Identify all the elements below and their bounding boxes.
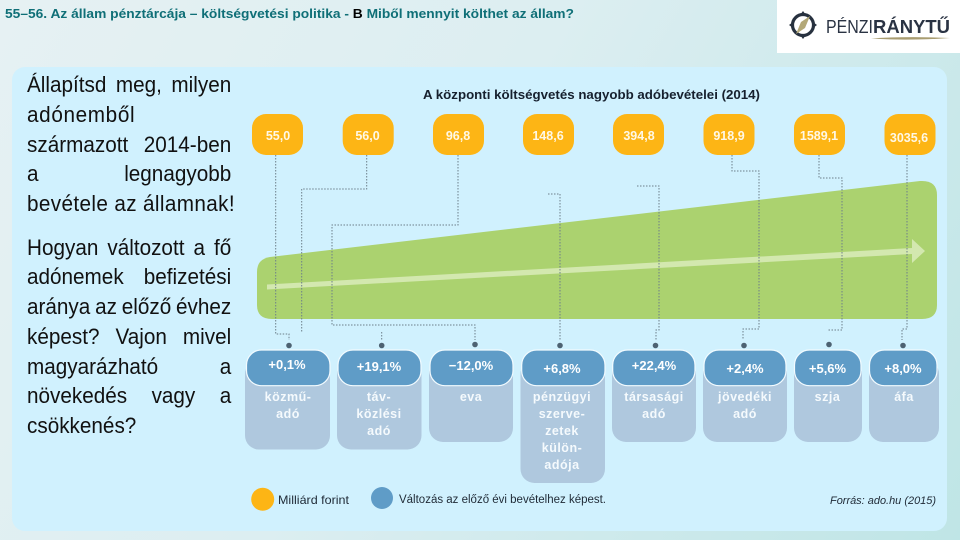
- text block: first question: bevétele az államnak!: [27, 191, 235, 216]
- change values: −12,0%: [449, 358, 494, 373]
- source: Forrás: ado.hu (2015): [830, 495, 936, 507]
- orange values: 1589,1: [800, 129, 838, 143]
- change values: +6,8%: [543, 361, 581, 376]
- orange values: 3035,6: [890, 131, 928, 145]
- text block: second question: csökkenés?: [27, 413, 136, 438]
- category labels: adó: [733, 407, 757, 421]
- category labels: [265, 390, 914, 472]
- change values: +8,0%: [884, 361, 922, 376]
- category labels: jövedéki: [717, 390, 772, 404]
- legend: billion forint: Milliárd forint: [278, 493, 350, 507]
- change values: +5,6%: [809, 361, 847, 376]
- category labels: közmű-: [265, 390, 311, 404]
- legend: change: Változás az előző évi bevételhez képest.: [399, 494, 606, 506]
- green growth wedge: [257, 181, 937, 319]
- icon: compass: [789, 11, 817, 39]
- text block: second question: aránya az előző évhez: [27, 294, 231, 319]
- category labels: társasági: [624, 390, 684, 404]
- category labels: adó: [367, 424, 391, 438]
- legend: change: [371, 487, 606, 509]
- blue change pills: [246, 350, 937, 386]
- category labels: eva: [460, 390, 483, 404]
- orange values: 918,9: [713, 129, 745, 143]
- connector dots: [286, 342, 906, 348]
- change values: [268, 357, 922, 376]
- text block: first question: a legnagyobb: [27, 161, 231, 186]
- chart title: A központi költségvetés nagyobb adóbevételei (2014): [423, 87, 760, 102]
- light blue label cards: [245, 360, 939, 483]
- text block: first question: Állapítsd meg, milyen: [27, 72, 231, 97]
- title: 55–56. Az állam pénztárcája – költségvetési politika - B Miből mennyit költhet az állam?: [5, 6, 574, 21]
- category labels: adó: [276, 407, 300, 421]
- orange values: [266, 129, 928, 145]
- category labels: áfa: [894, 390, 914, 404]
- logo wordmark: PÉNZI: [826, 17, 873, 37]
- category labels: külön-: [542, 441, 582, 455]
- category labels: pénzügyi: [533, 390, 591, 404]
- category labels: közlési: [356, 407, 402, 421]
- category labels: adó: [642, 407, 666, 421]
- logo wordmark: [826, 16, 950, 40]
- text block: first question: adónemből: [27, 102, 135, 127]
- change values: +19,1%: [357, 359, 402, 374]
- orange value boxes: [252, 114, 936, 155]
- logo wordmark: RÁNYTŰ: [873, 16, 950, 37]
- text block: second question: adónemek befizetési: [27, 264, 231, 289]
- orange values: 394,8: [623, 129, 655, 143]
- category labels: szerve-: [539, 407, 585, 421]
- logo: Pénziránytű: [777, 0, 960, 53]
- text block: second question: magyarázható a: [27, 354, 231, 379]
- connectors: [276, 155, 907, 340]
- text block: first question: származott 2014-ben: [27, 132, 231, 157]
- orange values: 148,6: [532, 129, 564, 143]
- category labels: táv-: [367, 390, 391, 404]
- category labels: szja: [815, 390, 841, 404]
- change values: +2,4%: [726, 361, 764, 376]
- text block: second question: [27, 234, 232, 438]
- text block: second question: Hogyan változott a fő: [27, 234, 231, 260]
- change values: +0,1%: [268, 357, 306, 372]
- change values: +22,4%: [632, 358, 677, 373]
- orange values: 55,0: [266, 129, 290, 143]
- orange values: 96,8: [446, 129, 470, 143]
- text block: second question: növekedés vagy a: [27, 383, 231, 408]
- category labels: zetek: [545, 424, 579, 438]
- text block: first question: [27, 72, 235, 216]
- category labels: adója: [544, 458, 580, 472]
- arrow: growth: [267, 239, 925, 290]
- legend: billion forint: [251, 488, 350, 511]
- text block: second question: képest? Vajon mivel: [27, 324, 231, 349]
- orange values: 56,0: [355, 129, 380, 143]
